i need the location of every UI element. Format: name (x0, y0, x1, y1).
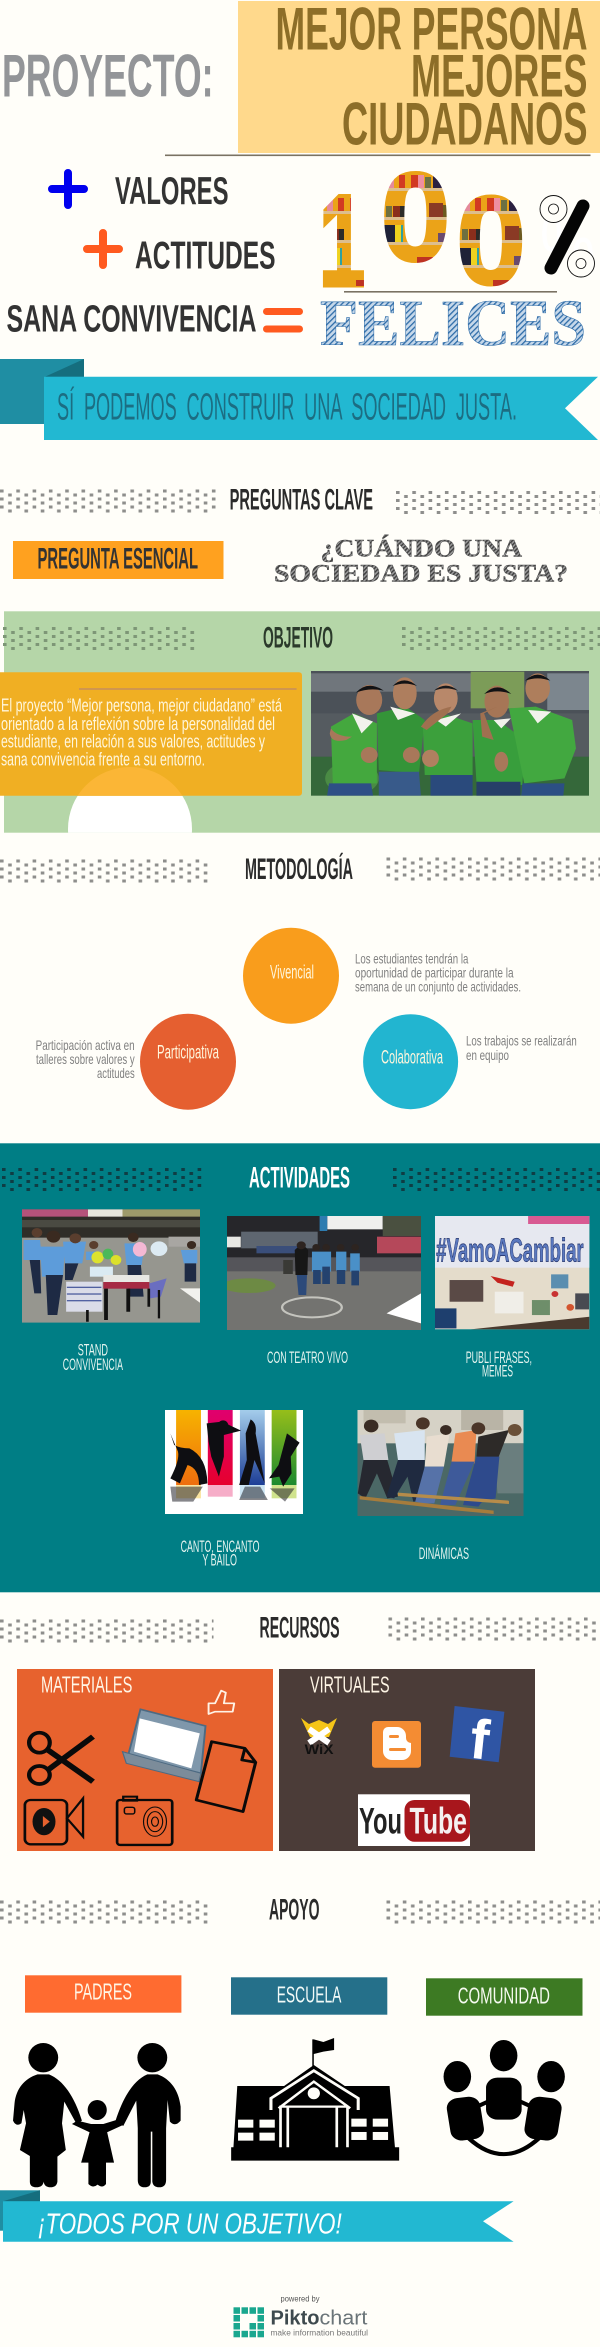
ribbon: si podemos (0, 359, 598, 440)
panel: virtuales (279, 1669, 535, 1851)
pregunta esencial label: PREGUNTA ESENCIAL (38, 543, 198, 576)
white half circle (68, 796, 192, 833)
title block (2, 0, 600, 157)
section header: apoyo: APOYO (269, 1893, 320, 1926)
icon: photo camera (117, 1797, 172, 1845)
section header: recursos: RECURSOS (260, 1611, 340, 1644)
caption: dinamicas: DINÁMICAS (419, 1544, 469, 1563)
text: vivencial description (355, 950, 521, 995)
circle: vivencial (243, 928, 339, 1024)
circle: participativa: Participativa (157, 1042, 219, 1063)
icon: orange plus (87, 233, 119, 265)
footer: piktochart logo: make information beautiful (270, 2329, 368, 2338)
caption: stand convivencia (63, 1341, 123, 1374)
heading: materiales: MATERIALES (41, 1672, 132, 1698)
footer: piktochart logo (234, 2294, 368, 2338)
label: escuela: ESCUELA (277, 1982, 342, 2008)
text card (0, 672, 302, 796)
icon: family (13, 2043, 181, 2187)
label: escuela (231, 1977, 387, 2015)
circle: colaborativa (363, 1014, 458, 1109)
text: colaborativa description (466, 1033, 577, 1063)
text: felices: FELICES (320, 287, 586, 360)
materials icons (25, 1691, 256, 1845)
text: participativa description: actitudes (97, 1065, 135, 1081)
label: padres: PADRES (74, 1978, 132, 2004)
icon: community group (444, 2040, 565, 2154)
text: vivencial description: semana de un conjunto de actividades. (355, 979, 521, 995)
photo: dinamicas (357, 1410, 524, 1516)
title block: PROYECTO: (2, 43, 214, 110)
text: colaborativa description: en equipo (466, 1047, 509, 1063)
pregunta esencial label (13, 541, 224, 579)
essential question text: SOCIEDAD ES JUSTA? (274, 561, 568, 588)
icon: paper sheet (196, 1742, 256, 1812)
big number 100 percent: 0 (456, 172, 526, 311)
caption: stand convivencia: CONVIVENCIA (63, 1355, 123, 1374)
icon: youtube: You (359, 1800, 402, 1841)
text: vivencial description: Los estudiantes tendrán la (355, 950, 469, 966)
section header: metodologia (0, 852, 600, 886)
big number 100 percent (319, 148, 595, 314)
text: participativa description: talleres sobre valores y (36, 1051, 135, 1067)
caption: publi frases: PUBLI FRASES, (466, 1348, 532, 1367)
photo: students in green shirts (311, 671, 589, 796)
section header: recursos (0, 1611, 600, 1644)
icons row (13, 2038, 565, 2187)
text: participativa description: Participación activa en (36, 1037, 135, 1053)
text: vivencial description: oportunidad de participar durante la (355, 965, 514, 981)
icon: blue plus (52, 173, 84, 205)
icon: youtube: Tube (410, 1800, 467, 1841)
icon: facebook (450, 1706, 504, 1772)
text card: orientado a la reflexión sobre la personalidad del (1, 713, 275, 734)
icon: school (231, 2038, 399, 2161)
essential question text (274, 535, 568, 588)
text: sana convivencia: SANA CONVIVENCIA (6, 299, 256, 341)
image: dancers silhouettes (165, 1410, 303, 1514)
text: participativa description (36, 1037, 135, 1081)
caption: canto encanto y baile: Y BAILO (202, 1551, 237, 1570)
icon: laptop (122, 1709, 206, 1782)
caption: publi frases (466, 1348, 532, 1381)
text: actitudes: ACTITUDES (135, 234, 276, 277)
caption: con teatro vivo: CON TEATRO VIVO (267, 1348, 348, 1367)
photo: vamo a cambiar mural (435, 1216, 590, 1330)
text card: sana convivencia frente a su entorno. (1, 749, 205, 770)
text: valores: VALORES (115, 170, 228, 213)
section header: apoyo (0, 1893, 600, 1926)
essential question text: ¿CUÁNDO UNA (321, 535, 522, 563)
icon: wix (301, 1718, 337, 1757)
icon: scissors (29, 1733, 93, 1784)
panel: objetivo (0, 611, 600, 833)
panel: actividades: ACTIVIDADES (249, 1161, 350, 1194)
panel: objetivo: OBJETIVO (263, 621, 333, 654)
section header: preguntas clave: PREGUNTAS CLAVE (230, 483, 373, 516)
icon: youtube (358, 1794, 470, 1846)
footer: piktochart logo: Pikto (270, 2307, 320, 2329)
footer: piktochart logo: chart (320, 2307, 368, 2329)
icon: blogger (372, 1721, 421, 1768)
icon: facebook: f (467, 1707, 493, 1772)
photo: stand convivencia (22, 1209, 200, 1323)
caption: stand convivencia: STAND (78, 1341, 108, 1360)
text card: estudiante, en relación a sus valores, actitudes y (1, 731, 265, 752)
circle: participativa (140, 1014, 236, 1110)
label: comunidad: COMUNIDAD (458, 1983, 550, 2009)
heading: virtuales: VIRTUALES (310, 1672, 390, 1698)
icon: wix: WiX (305, 1741, 334, 1757)
circle: colaborativa: Colaborativa (381, 1047, 443, 1068)
big number 100 percent: 0 (381, 148, 450, 288)
caption: canto encanto y baile: CANTO, ENCANTO (181, 1537, 260, 1556)
photo: con teatro vivo (227, 1216, 421, 1330)
panel: materiales (17, 1669, 273, 1851)
section header: preguntas clave (0, 483, 600, 516)
caption: publi frases: MEMES (482, 1362, 513, 1381)
caption: canto encanto y baile (181, 1537, 260, 1570)
footer: piktochart logo: powered by (280, 2294, 320, 2304)
label: padres (25, 1975, 181, 2013)
text card: El proyecto “Mejor persona, mejor ciudadano” está (1, 695, 282, 716)
icon: thumbs up (209, 1691, 234, 1714)
ribbon: todos por un objetivo: ¡TODOS POR UN OBJETIVO! (38, 2208, 342, 2240)
icon: video camera (25, 1798, 83, 1844)
label: comunidad (426, 1978, 582, 2016)
panel: actividades (0, 1143, 600, 1592)
big number 100 percent: 1 (319, 168, 365, 314)
section header: metodologia: METODOLOGÍA (245, 852, 353, 886)
circle: vivencial: Vivencial (270, 962, 314, 983)
ribbon: todos por un objetivo (0, 2190, 514, 2242)
icon: equals sign (263, 308, 303, 332)
